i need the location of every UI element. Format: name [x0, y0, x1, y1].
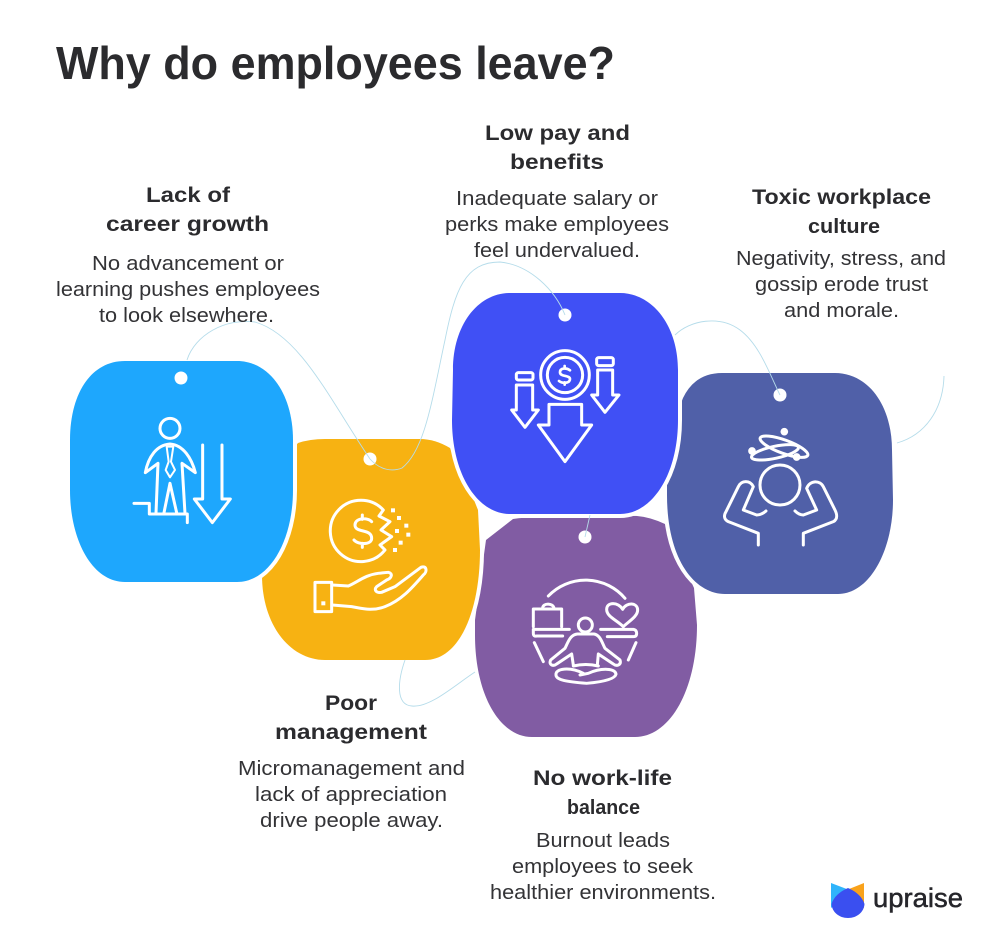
text block: no work-life balance	[490, 766, 716, 904]
marker dot	[558, 308, 572, 322]
text block: lack of career growth: Lack of	[146, 183, 231, 207]
shape: sky blue squircle	[70, 361, 293, 582]
text block: poor management: drive people away.	[260, 810, 443, 832]
text block: low pay and benefits: Inadequate salary or	[456, 188, 658, 210]
marker dot	[174, 372, 188, 384]
icon: stressed person holding head	[724, 429, 837, 545]
text block: low pay and benefits: feel undervalued.	[474, 240, 640, 262]
shape: indigo squircle	[452, 293, 678, 514]
text block: poor management: management	[275, 720, 427, 744]
text block: low pay and benefits: benefits	[510, 150, 604, 174]
panel: low pay and benefits	[452, 293, 678, 514]
icon: meditating person balancing work and heart	[533, 580, 638, 683]
text block: no work-life balance: No work-life	[533, 766, 672, 790]
shape: slate blue squircle	[667, 373, 893, 594]
text block: toxic workplace culture: gossip erode trust	[755, 274, 928, 296]
wordmark: upraise	[873, 883, 963, 913]
icon: crumbling coin over open hand	[315, 500, 426, 612]
icon: logo mark	[831, 883, 864, 918]
connector lines	[187, 262, 944, 706]
panel: toxic workplace culture	[667, 373, 893, 594]
text block: toxic workplace culture: Negativity, stress, and	[736, 248, 946, 270]
text block: poor management	[238, 691, 465, 832]
text block: no work-life balance: balance	[567, 796, 640, 819]
text block: low pay and benefits	[445, 121, 669, 262]
text block: poor management: Poor	[325, 691, 378, 715]
panel: no work-life balance	[475, 516, 697, 737]
text block: lack of career growth: No advancement or	[92, 253, 284, 275]
text block: poor management: Micromanagement and	[238, 758, 465, 780]
panel: poor management	[262, 439, 480, 660]
text block: low pay and benefits: perks make employees	[445, 214, 669, 236]
text block: no work-life balance: healthier environments.	[490, 882, 716, 904]
text block: toxic workplace culture: and morale.	[784, 300, 899, 322]
text block: no work-life balance: employees to seek	[512, 856, 694, 878]
text block: lack of career growth: to look elsewhere.	[99, 305, 274, 327]
text block: lack of career growth: learning pushes employees	[56, 279, 320, 301]
text block: lack of career growth	[56, 183, 320, 327]
text block: toxic workplace culture: culture	[808, 215, 880, 238]
text block: no work-life balance: Burnout leads	[536, 830, 670, 852]
text block: low pay and benefits: Low pay and	[485, 121, 630, 145]
text block: toxic workplace culture	[736, 185, 946, 322]
shape: purple squircle	[475, 516, 697, 737]
marker dot	[774, 388, 786, 402]
logo: upraise	[831, 883, 963, 918]
marker dot	[578, 530, 592, 544]
icon: businessman stepping down beside arrow	[134, 418, 230, 523]
icon: falling coin and down arrows	[512, 351, 619, 462]
marker dot	[364, 452, 376, 466]
panel: lack of career growth	[70, 361, 293, 582]
text block: lack of career growth: career growth	[106, 212, 269, 236]
text block: toxic workplace culture: Toxic workplace	[752, 185, 931, 209]
text block: poor management: lack of appreciation	[255, 784, 447, 806]
shape: orange squircle	[262, 439, 480, 660]
title: Why do employees leave?	[56, 37, 615, 89]
